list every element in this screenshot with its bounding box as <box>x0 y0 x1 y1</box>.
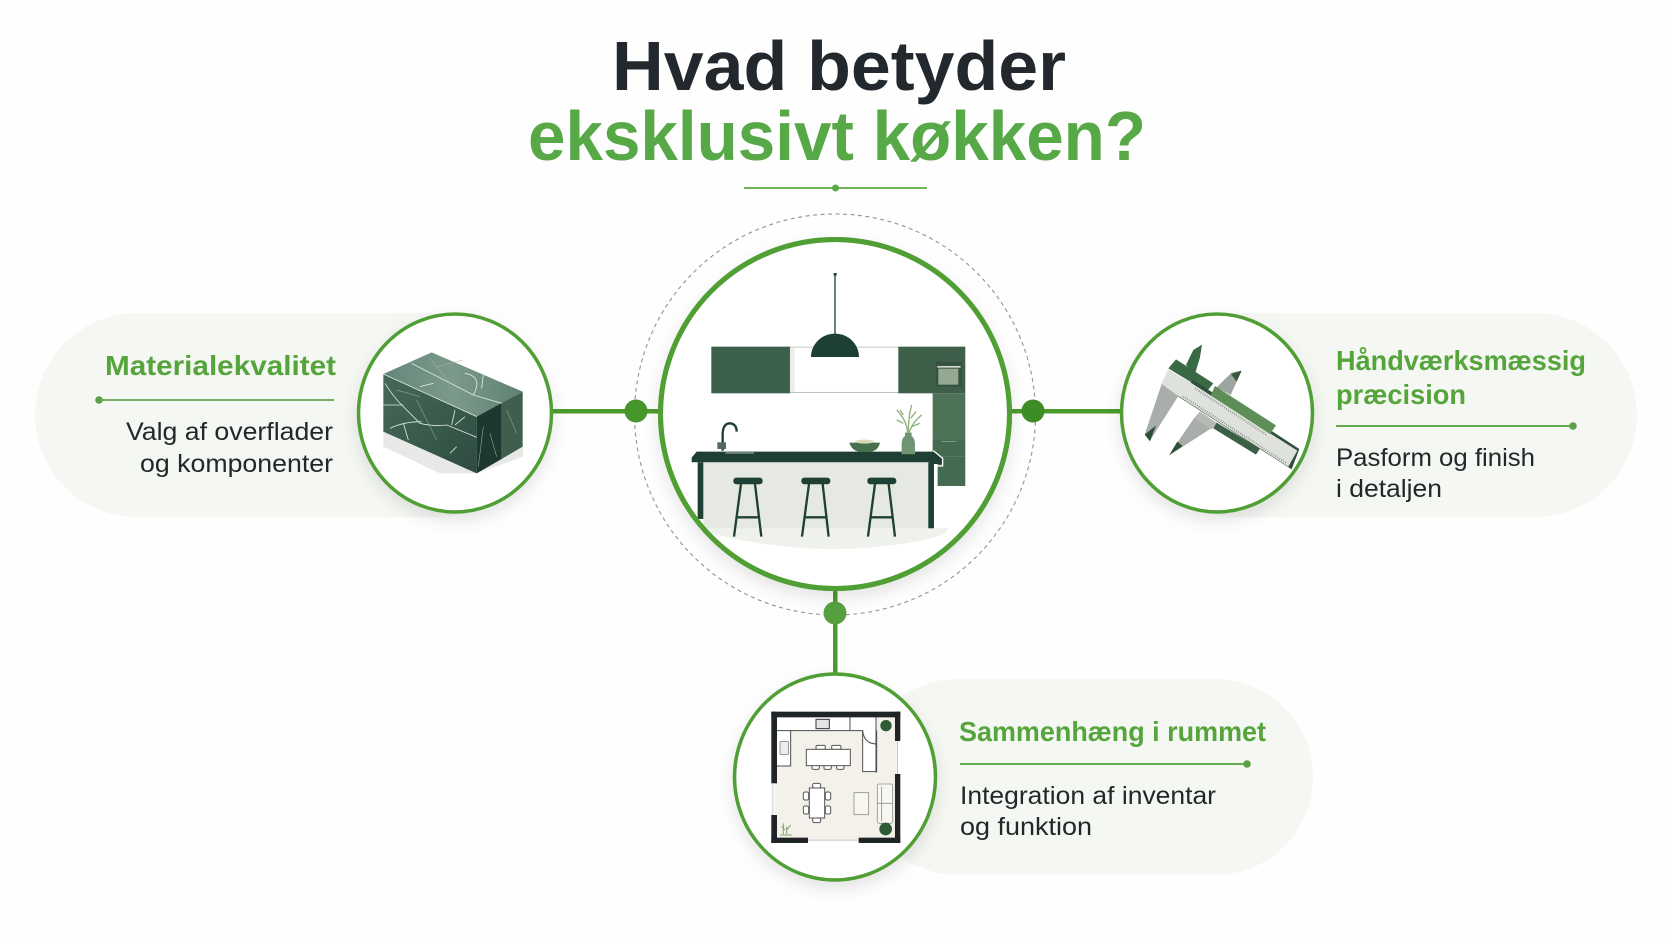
text block: Materialekvalitet: Materialekvalitet <box>105 350 336 381</box>
title <box>528 27 1146 175</box>
connectors <box>550 409 1122 675</box>
text block: Håndværksmæssig præcision <box>1336 345 1586 503</box>
panel: floor plan circle <box>734 674 936 880</box>
pendant lamp <box>811 273 859 357</box>
title: Hvad betyder <box>612 27 1066 105</box>
icon: floor plan <box>771 712 900 843</box>
panel: marble circle <box>358 314 552 512</box>
illustration: kitchen <box>692 273 965 549</box>
panel: bottom pill background <box>860 679 1313 875</box>
panel: left pill background <box>35 313 535 517</box>
connector node: bottom <box>824 602 846 624</box>
text block: Materialekvalitet: og komponenter <box>140 450 333 478</box>
text block: Materialekvalitet: Valg af overflader <box>126 418 333 446</box>
text block: Håndværksmæssig præcision: Pasform og finish <box>1336 444 1535 472</box>
panel: right pill background <box>1137 313 1637 517</box>
text block: Håndværksmæssig præcision: præcision <box>1336 379 1466 410</box>
dashed ring <box>634 214 1036 615</box>
text block: Materialekvalitet <box>95 350 336 478</box>
text block: Håndværksmæssig præcision: i detaljen <box>1336 475 1442 503</box>
text block: Sammenhæng i rummet <box>959 716 1266 841</box>
icon: caliper <box>1145 345 1299 469</box>
connector node: left <box>624 400 648 422</box>
title divider <box>744 184 927 192</box>
text block: Sammenhæng i rummet: og funktion <box>960 813 1092 841</box>
connector node: right <box>1022 400 1044 422</box>
panel: central kitchen circle <box>660 240 1010 588</box>
panel: caliper circle <box>1122 314 1312 512</box>
icon: marble block <box>383 352 523 473</box>
title: eksklusivt køkken? <box>528 97 1146 175</box>
text block: Sammenhæng i rummet: Sammenhæng i rummet <box>959 716 1266 747</box>
text block: Håndværksmæssig præcision: Håndværksmæssig <box>1336 345 1586 376</box>
stools <box>734 484 895 537</box>
text block: Sammenhæng i rummet: Integration af inventar <box>960 782 1216 810</box>
